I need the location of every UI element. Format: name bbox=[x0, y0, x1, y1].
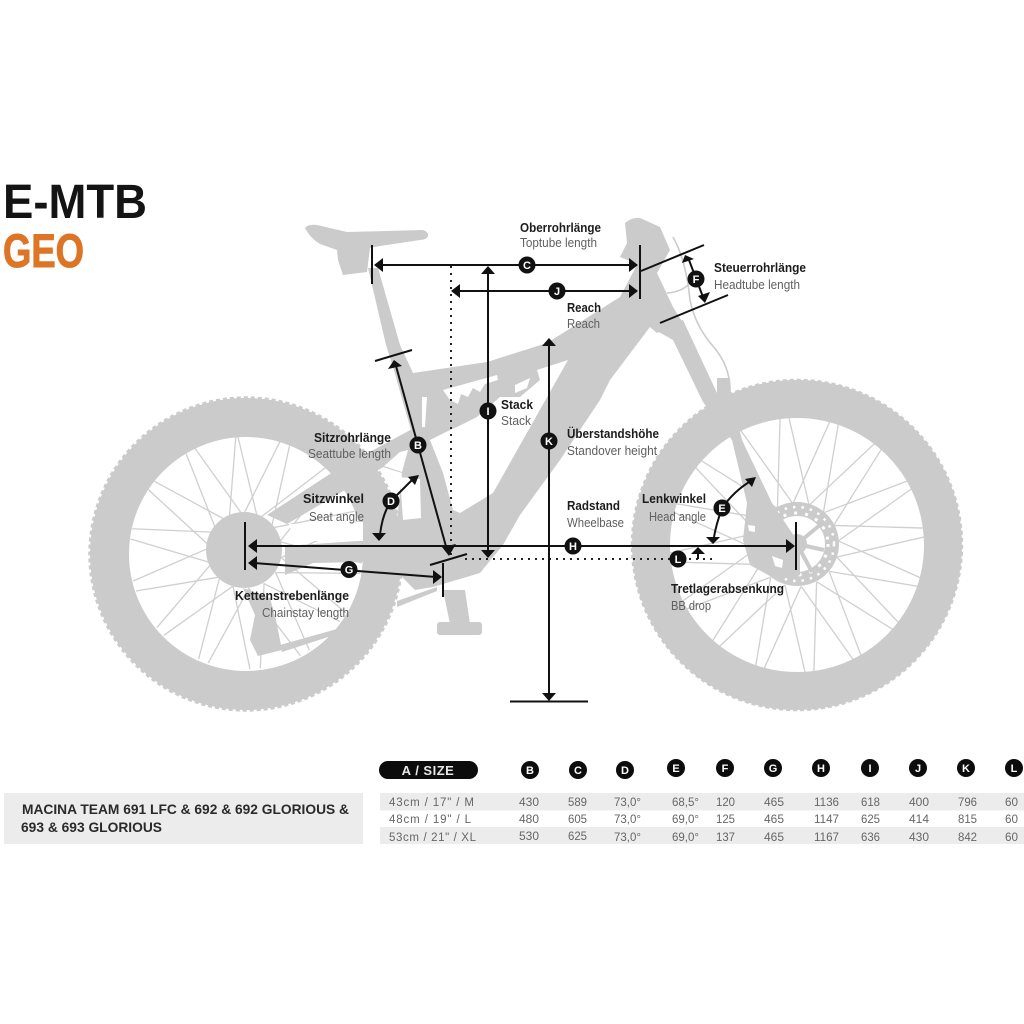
rear stays bbox=[267, 428, 420, 575]
label: chainstay: Kettenstrebenlänge bbox=[235, 588, 349, 603]
label: head tube bbox=[714, 260, 806, 292]
panel: model name: 693 & 693 GLORIOUS bbox=[21, 819, 162, 835]
column header badges: L bbox=[1011, 763, 1018, 775]
front wheel bbox=[632, 380, 962, 710]
measure K: standover height bbox=[510, 338, 588, 702]
title bbox=[3, 176, 147, 277]
label: seat angle: Sitzwinkel bbox=[303, 491, 364, 506]
label: wheelbase bbox=[567, 498, 624, 530]
row: size M: 68,5° bbox=[672, 797, 699, 809]
saddle bbox=[305, 225, 428, 275]
row: size XL: 1167 bbox=[814, 832, 839, 844]
label: seat tube: Sitzrohrlänge bbox=[314, 430, 391, 445]
row: size L bbox=[389, 814, 1018, 826]
label: chainstay: Chainstay length bbox=[262, 605, 349, 620]
measure E: head angle bbox=[706, 477, 756, 544]
label: top tube: Toptube length bbox=[520, 235, 597, 250]
measure F: headtube length bbox=[641, 245, 728, 323]
label: BB drop: Tretlagerabsenkung bbox=[671, 581, 784, 596]
measure K: standover height: K bbox=[545, 436, 553, 448]
row: size L: 60 bbox=[1005, 814, 1018, 826]
row: size M: 589 bbox=[568, 797, 587, 809]
label: wheelbase: Wheelbase bbox=[567, 515, 624, 530]
column header badges: H bbox=[817, 763, 825, 775]
measure E: head angle: E bbox=[718, 503, 726, 515]
row: size XL: 73,0° bbox=[614, 832, 641, 844]
size header pill: A / SIZE bbox=[402, 763, 454, 778]
label: stack: Stack bbox=[501, 413, 531, 428]
row: size L: 125 bbox=[716, 814, 735, 826]
row: size L: 73,0° bbox=[614, 814, 641, 826]
label: head angle bbox=[642, 491, 706, 524]
row: size XL: 465 bbox=[764, 832, 784, 844]
label: reach: Reach bbox=[567, 316, 600, 331]
row: size XL: 430 bbox=[909, 832, 929, 844]
label: stack: Stack bbox=[501, 397, 534, 412]
label: reach bbox=[567, 300, 601, 331]
label: BB drop: BB drop bbox=[671, 598, 711, 613]
label: head angle: Lenkwinkel bbox=[642, 491, 706, 506]
row: size L: 69,0° bbox=[672, 814, 699, 826]
row: size XL: 636 bbox=[861, 832, 880, 844]
measure I: stack bbox=[480, 266, 496, 558]
row: size XL: 625 bbox=[568, 831, 587, 843]
row: size M: 120 bbox=[716, 797, 735, 809]
measure D: seat angle bbox=[372, 475, 419, 541]
column header badges: B bbox=[526, 765, 534, 777]
label: seat tube bbox=[308, 430, 391, 461]
label: reach: Reach bbox=[567, 300, 601, 315]
measure L: BB drop: L bbox=[675, 554, 682, 566]
label: chainstay bbox=[235, 588, 349, 620]
column header badges: G bbox=[769, 763, 777, 775]
label: top tube bbox=[520, 220, 601, 250]
row: size L: 1147 bbox=[814, 814, 839, 826]
derailleur bbox=[243, 588, 282, 656]
column header badges bbox=[521, 759, 1023, 779]
bike silhouette bbox=[90, 218, 962, 710]
label: wheelbase: Radstand bbox=[567, 498, 620, 513]
label: standover: Überstandshöhe bbox=[567, 426, 659, 441]
label: BB drop bbox=[671, 581, 784, 613]
row: size M: 73,0° bbox=[614, 797, 641, 809]
row: size M: 400 bbox=[909, 797, 929, 809]
measure H: wheelbase: H bbox=[569, 541, 577, 553]
row: size XL: 60 bbox=[1005, 832, 1018, 844]
row: size M: 430 bbox=[519, 797, 539, 809]
row: size XL: 842 bbox=[958, 832, 977, 844]
column header badges: C bbox=[574, 765, 582, 777]
title: E-MTB bbox=[3, 176, 147, 229]
label: seat angle bbox=[303, 491, 364, 524]
row: size XL: 69,0° bbox=[672, 832, 699, 844]
table row stripes bbox=[380, 793, 1024, 844]
measure D: seat angle: D bbox=[387, 496, 395, 508]
row: size L: 480 bbox=[519, 814, 539, 826]
label: standover bbox=[567, 426, 659, 458]
measure I: stack: I bbox=[486, 406, 490, 418]
row: size L: 815 bbox=[958, 814, 977, 826]
measure C: top tube bbox=[372, 245, 640, 299]
row: size XL: 137 bbox=[716, 832, 735, 844]
brake cable bbox=[667, 237, 730, 390]
fork bbox=[650, 320, 800, 580]
measure F: headtube length: F bbox=[693, 274, 700, 286]
column header badges: F bbox=[722, 763, 729, 775]
row: size L: 48cm / 19" / L bbox=[389, 814, 472, 826]
measure B: seat tube length bbox=[375, 350, 456, 556]
row: size M: 465 bbox=[764, 797, 784, 809]
measure L: BB drop bbox=[670, 547, 705, 568]
row: size M: 618 bbox=[861, 797, 880, 809]
measure B: seat tube length: B bbox=[414, 440, 422, 452]
rear wheel bbox=[90, 398, 402, 710]
row: size L: 625 bbox=[861, 814, 880, 826]
column header badges: E bbox=[672, 763, 680, 775]
column header badges: I bbox=[868, 763, 872, 775]
measure J: reach bbox=[451, 282, 638, 300]
label: standover: Standover height bbox=[567, 443, 657, 458]
column header badges: K bbox=[962, 763, 970, 775]
measure J: reach: J bbox=[554, 286, 560, 298]
row: size M: 796 bbox=[958, 797, 977, 809]
measure H: wheelbase bbox=[245, 522, 796, 570]
table: geometry values bbox=[379, 759, 1024, 844]
row: size XL: 530 bbox=[519, 831, 539, 843]
seat post and frame bbox=[368, 263, 683, 590]
row: size XL bbox=[389, 831, 1018, 844]
row: size M: 1136 bbox=[814, 797, 839, 809]
column header badges: J bbox=[915, 763, 921, 775]
title: GEO bbox=[3, 224, 84, 277]
chain bbox=[280, 587, 437, 652]
label: seat tube: Seattube length bbox=[308, 446, 391, 461]
row: size XL: 53cm / 21" / XL bbox=[389, 832, 477, 844]
measure C: top tube: C bbox=[523, 260, 531, 272]
label: head tube: Headtube length bbox=[714, 277, 800, 292]
panel: model name: MACINA TEAM 691 LFC & 692 & 692 GLORIOUS & bbox=[22, 801, 349, 817]
label: stack bbox=[501, 397, 534, 428]
measure G: chainstay length bbox=[248, 554, 467, 597]
stem and handlebar bbox=[620, 218, 670, 273]
frame cutouts bbox=[289, 360, 783, 568]
row: size L: 465 bbox=[764, 814, 784, 826]
measure G: chainstay length: G bbox=[345, 564, 353, 576]
label: top tube: Oberrohrlänge bbox=[520, 220, 601, 235]
row: size M: 43cm / 17" / M bbox=[389, 797, 474, 809]
row: size M bbox=[389, 797, 1018, 809]
row: size M: 60 bbox=[1005, 797, 1018, 809]
label: head tube: Steuerrohrlänge bbox=[714, 260, 806, 275]
column header badges: D bbox=[621, 765, 629, 777]
row: size L: 414 bbox=[909, 814, 930, 826]
panel: model name bbox=[4, 793, 363, 844]
crank and pedal bbox=[443, 590, 470, 624]
row: size L: 605 bbox=[568, 814, 587, 826]
label: seat angle: Seat angle bbox=[309, 509, 364, 524]
dotted reference lines bbox=[451, 266, 716, 559]
label: head angle: Head angle bbox=[649, 509, 706, 524]
size header pill bbox=[379, 761, 478, 779]
